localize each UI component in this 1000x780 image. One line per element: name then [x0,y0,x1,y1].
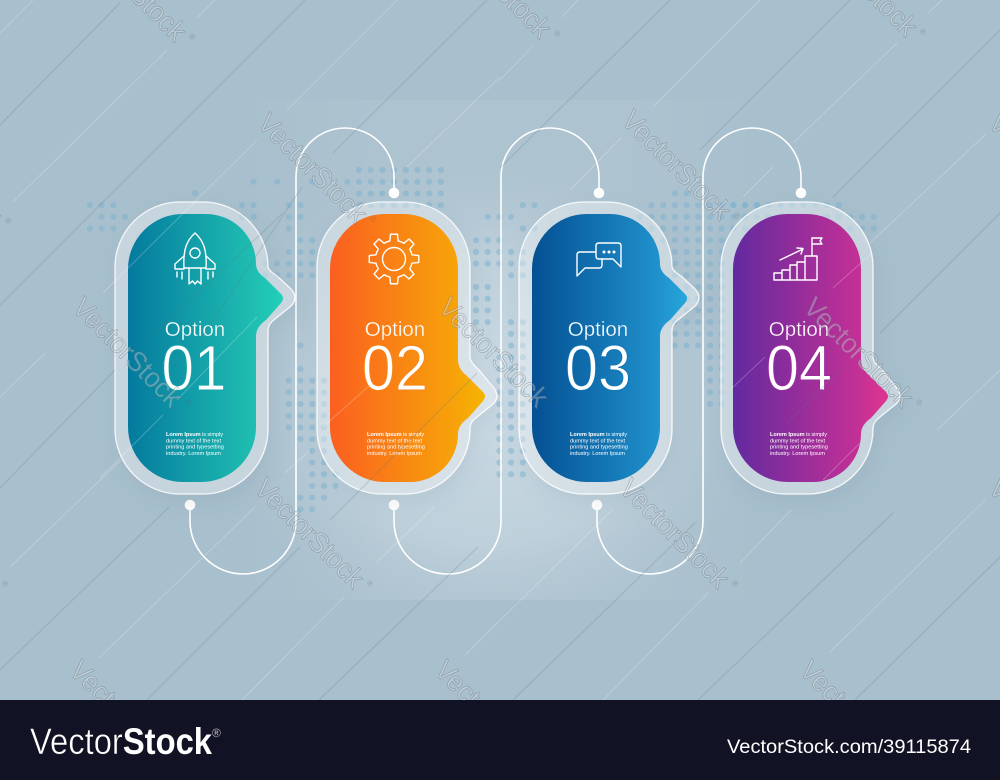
watermarks: VectorStock [429,654,551,777]
watermarks: ® [183,397,193,408]
watermarks: ® [730,578,740,589]
panel: option 03 [519,202,699,494]
text block 02: Lorem Ipsum is simply [367,432,424,438]
watermarks: VectorStock [64,654,186,777]
connector lines [190,128,801,574]
text block 01: industry. Lorem Ipsum [166,451,221,457]
watermarks: ® [552,28,562,39]
watermarks: VectorStock [794,654,916,777]
number: 01: 01 [162,332,226,404]
glass outline 02 [317,202,497,494]
watermarks: ® [732,210,742,221]
icon: chat bubbles [577,243,621,276]
label: option 01: Option [165,318,225,341]
text block 01: dummy text of the text [166,438,221,444]
text block 04: dummy text of the text [770,438,825,444]
colour shape 04 [733,214,888,482]
text block 03: dummy text of the text [570,438,625,444]
panel: option 01 [115,202,295,494]
colour shape 01 [128,214,283,482]
connector: 03 to 04 [597,128,801,574]
watermarks: ® [368,213,378,224]
label: option 02: Option [365,318,425,341]
watermarks: VectorStock [614,472,736,595]
text block 03: Lorem Ipsum is simply [570,432,627,438]
text block 02: printing and typesetting [367,445,425,451]
glass outline 01 [115,202,295,494]
watermarks: VectorStock [616,104,738,227]
watermarks: ® [549,397,559,408]
watermarks: ® [187,31,197,42]
glass outline 03 [519,202,699,494]
watermarks: VectorStock [67,291,189,414]
connector: 02 to 03 [394,128,599,574]
label: option 03: Option [568,318,628,341]
icon: growth chart with flag [774,238,822,280]
text block 01: printing and typesetting [166,445,224,451]
text block 01: Lorem Ipsum is simply [166,432,223,438]
connector: 01 to 02 [190,128,394,574]
number: 04: 04 [766,332,832,404]
colour shape 02 [330,214,485,482]
footer logo: VectorStock [30,721,212,762]
label: option 04: Option [769,318,829,341]
text block 03: printing and typesetting [570,445,628,451]
watermarks: VectorStock [252,107,374,230]
dotted world map [84,164,880,515]
panel: option 02 [317,202,497,494]
icon: rocket [175,233,215,284]
text block 04: Lorem Ipsum is simply [770,432,827,438]
footer image id: VectorStock.com/39115874 [727,737,971,758]
text block 02: dummy text of the text [367,438,422,444]
watermarks: VectorStock [433,291,555,414]
connector dots [185,188,806,510]
text block 04: industry. Lorem Ipsum [770,451,825,457]
watermarks: ® [918,26,928,37]
colour shape 03 [532,214,687,482]
footer bar [0,700,1000,780]
single map dots [192,179,315,372]
watermarks: VectorStock [798,291,920,414]
panel: option 04 [721,202,900,494]
text block 03: industry. Lorem Ipsum [570,451,625,457]
watermarks: ® [0,578,10,589]
icon: gear [369,234,419,284]
watermarks: ® [914,397,924,408]
text block 02: industry. Lorem Ipsum [367,451,422,457]
watermarks: ® [3,215,13,226]
watermarks: ® [365,578,375,589]
glass outline 04 [721,202,900,494]
watermarks: VectorStock [249,472,371,595]
number: 02: 02 [362,332,428,404]
number: 03: 03 [565,332,631,404]
footer registered mark: ® [212,726,221,740]
text block 04: printing and typesetting [770,445,828,451]
